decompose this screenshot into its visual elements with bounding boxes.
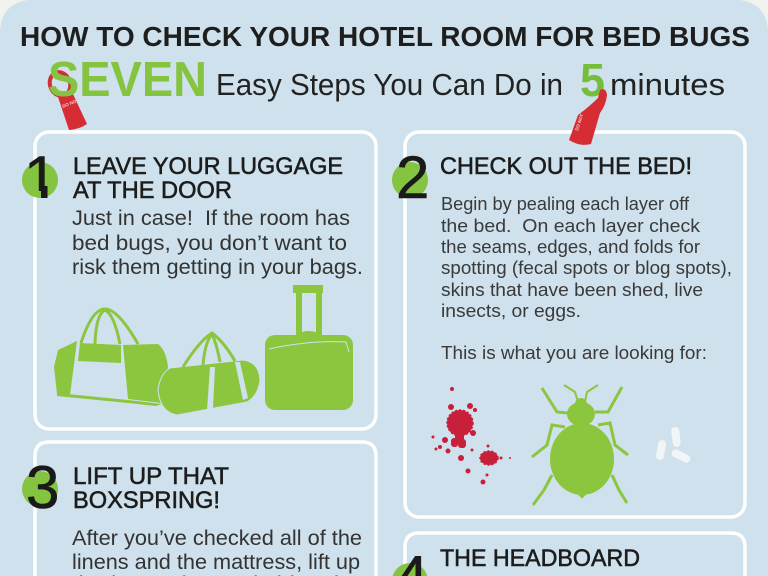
heading: LIFT UP THAT [73, 463, 229, 490]
heading: LEAVE YOUR LUGGAGE [73, 153, 343, 180]
body text: linens and the mattress, lift up [72, 550, 360, 574]
subtitle text: easy steps: Easy Steps You Can Do in [216, 67, 563, 102]
icon: large duffel bag [54, 309, 168, 406]
panel: step 4 [392, 533, 745, 576]
icon: rolling suitcase [265, 285, 353, 410]
body text: bed bugs, you don’t want to [72, 231, 347, 255]
body text: After you’ve checked all of the [72, 526, 362, 550]
body text: risk them getting in your bags. [72, 255, 363, 279]
body text: skins that have been shed, live [441, 279, 703, 300]
subtitle [48, 53, 725, 107]
icon: small duffel bag [158, 333, 260, 415]
body text: insects, or eggs. [441, 300, 581, 321]
heading: BOXSPRING! [73, 487, 220, 514]
number badge 1: 1 [24, 144, 57, 211]
tag text: DO NOT [62, 98, 80, 109]
body text: Just in case! If the room has [72, 206, 350, 230]
number badge 3: 3 [26, 454, 59, 521]
icon: bed bug [532, 385, 628, 505]
subtitle text: minutes: minutes [610, 67, 725, 102]
panel: step 2 [392, 132, 745, 517]
number badge 2: 2 [396, 144, 429, 211]
tag text: DO NOT [574, 113, 584, 131]
body text: the bed. On each layer check [441, 215, 701, 236]
panel: step 1 [22, 132, 376, 429]
heading: CHECK OUT THE BED! [440, 153, 692, 180]
word: seven: SEVEN [48, 53, 207, 107]
caption: This is what you are looking for: [441, 342, 707, 363]
heading: THE HEADBOARD [440, 545, 640, 572]
title: HOW TO CHECK YOUR HOTEL ROOM FOR BED BUGS [20, 21, 750, 52]
icon: blood spots [432, 387, 511, 484]
panel: step 3 [22, 442, 376, 576]
body text: spotting (fecal spots or blog spots), [441, 257, 732, 278]
body text: Begin by pealing each layer off [441, 193, 690, 214]
heading: AT THE DOOR [73, 177, 232, 204]
number badge 1 [22, 156, 58, 198]
icon: door hanger right [569, 89, 607, 145]
icon: door hanger left [46, 69, 87, 130]
number: five: 5 [580, 54, 605, 106]
icon: eggs [655, 427, 692, 464]
body text: the seams, edges, and folds for [441, 236, 700, 257]
